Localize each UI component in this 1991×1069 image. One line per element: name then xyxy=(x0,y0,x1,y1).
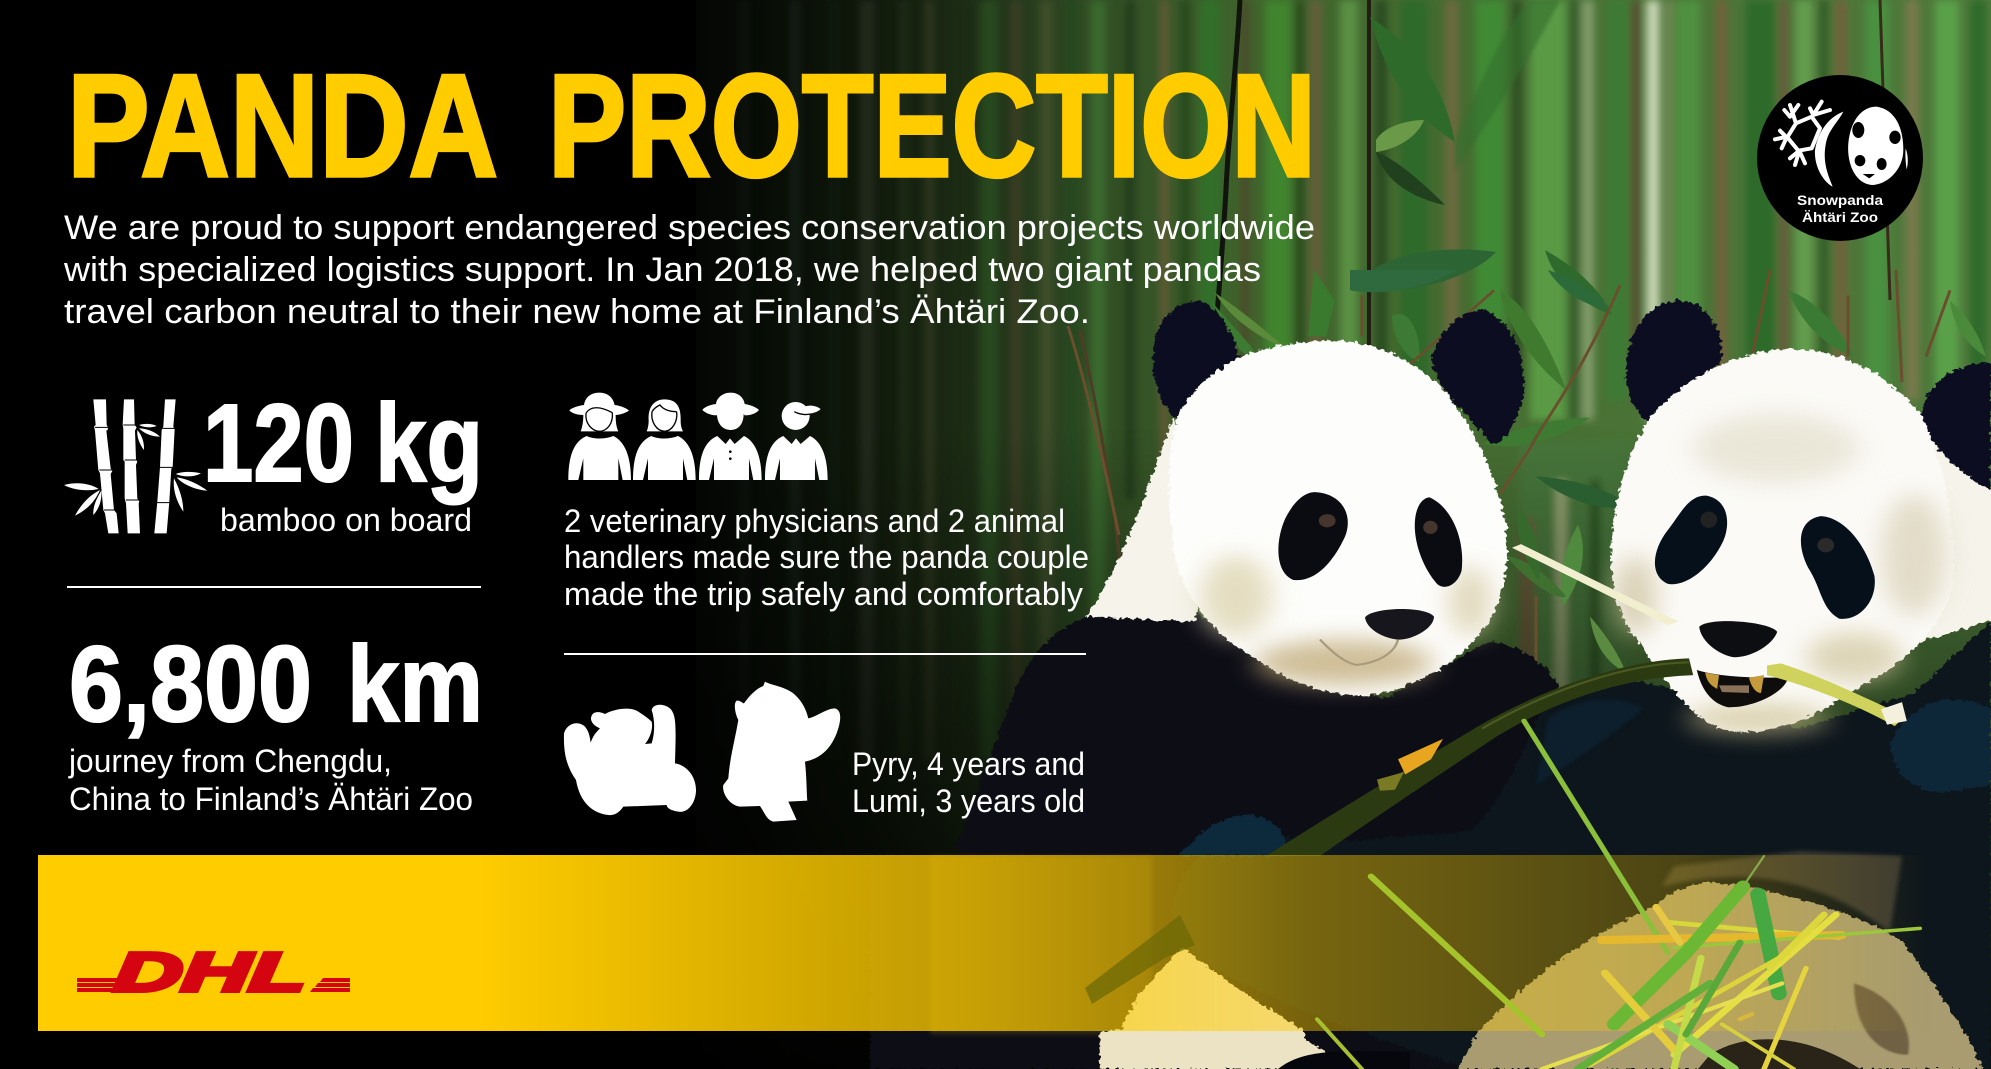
white shoulder xyxy=(1086,418,1218,622)
person 3 xyxy=(699,393,762,480)
person 2 xyxy=(633,399,696,480)
stat: 6,800 km journey: km xyxy=(347,623,483,744)
caption: bamboo on board xyxy=(220,502,472,538)
white shoulder xyxy=(1902,423,1991,647)
big number: 120 xyxy=(203,382,354,505)
grass and hay pile xyxy=(1317,721,1920,1069)
photo: bamboo stems and leaves xyxy=(1068,0,1986,673)
panda right: head xyxy=(1610,300,1991,734)
caption: journey from Chengdu, xyxy=(68,743,392,779)
intro text: We are proud to support endangered species conservation projects worldwide xyxy=(64,209,1315,247)
head shading xyxy=(1200,555,1491,685)
left eye patch xyxy=(1655,496,1727,584)
intro text: travel carbon neutral to their new home at Finland’s Ähtäri Zoo. xyxy=(64,293,1090,331)
icon: zoo logo xyxy=(1757,75,1923,241)
wordmark: DHL xyxy=(112,941,310,1003)
title xyxy=(67,44,1316,207)
panda right: body xyxy=(1172,622,1991,1069)
left ear xyxy=(1153,300,1239,418)
intro text xyxy=(63,209,1315,331)
nose xyxy=(1365,609,1434,640)
big number: 6,800 xyxy=(69,623,312,744)
head shading xyxy=(1614,413,1947,734)
icon: panda silhouettes xyxy=(564,682,840,822)
right eye patch xyxy=(1801,516,1875,619)
bamboo stalk in mouth xyxy=(1266,544,1907,856)
bamboo stalk end under band xyxy=(1085,915,1195,1004)
right ear xyxy=(1431,311,1524,443)
caption: Pyry, 4 years and xyxy=(852,746,1085,782)
icon: snowflake xyxy=(1775,102,1830,165)
person 1 xyxy=(568,393,631,480)
caption: 2 veterinary physicians and 2 animal xyxy=(564,503,1065,539)
panda right: belly fur xyxy=(1278,851,1983,1069)
right eye patch xyxy=(1415,497,1462,587)
icon: zoo logo: Ähtäri Zoo xyxy=(1802,209,1878,225)
logo text: Snowpanda xyxy=(1797,192,1883,208)
right ear xyxy=(1920,363,1991,490)
cream lower fur xyxy=(1100,947,1356,1069)
speed lines left xyxy=(77,978,124,992)
left eye patch xyxy=(1278,492,1348,580)
yellow footer band xyxy=(38,855,1991,1031)
stat: 120 kg bamboo xyxy=(64,382,483,538)
stat: team of four xyxy=(564,393,1089,612)
title: PANDA xyxy=(67,44,498,207)
stat: 6,800 km journey: China to Finland’s Ähtäri Zoo xyxy=(69,781,473,817)
left ear xyxy=(1626,300,1722,423)
stat: team of four: handlers made sure the panda couple xyxy=(564,539,1089,575)
divider xyxy=(67,586,481,588)
stat: team of four: made the trip safely and comfortably xyxy=(564,576,1083,612)
title: PROTECTION xyxy=(548,44,1316,207)
stat: 120 kg bamboo: kg xyxy=(375,382,483,505)
panda left: head xyxy=(1086,300,1524,696)
stat: 6,800 km journey xyxy=(68,623,483,817)
mouth xyxy=(1697,670,1788,707)
nose xyxy=(1699,621,1777,657)
black bar (masks photo on the left) xyxy=(0,0,38,1069)
icon: panda face xyxy=(1848,107,1903,185)
intro text: with specialized logistics support. In Jan 2018, we helped two giant pandas xyxy=(63,251,1261,289)
stat: pandas Pyry and Lumi: Lumi, 3 years old xyxy=(852,783,1085,819)
photo background: green foliage xyxy=(696,0,1991,1069)
person 4 xyxy=(765,402,828,480)
head fur xyxy=(1610,349,1953,732)
divider xyxy=(564,653,1086,655)
icon: bamboo xyxy=(64,399,207,533)
stat: pandas Pyry and Lumi xyxy=(564,682,1085,822)
head fur xyxy=(1169,341,1507,696)
panda left: body xyxy=(870,611,1650,1069)
speed lines right xyxy=(310,978,350,992)
icon: swoosh xyxy=(1815,112,1843,187)
DHL logo xyxy=(77,941,350,1003)
icon: four people xyxy=(568,393,828,480)
